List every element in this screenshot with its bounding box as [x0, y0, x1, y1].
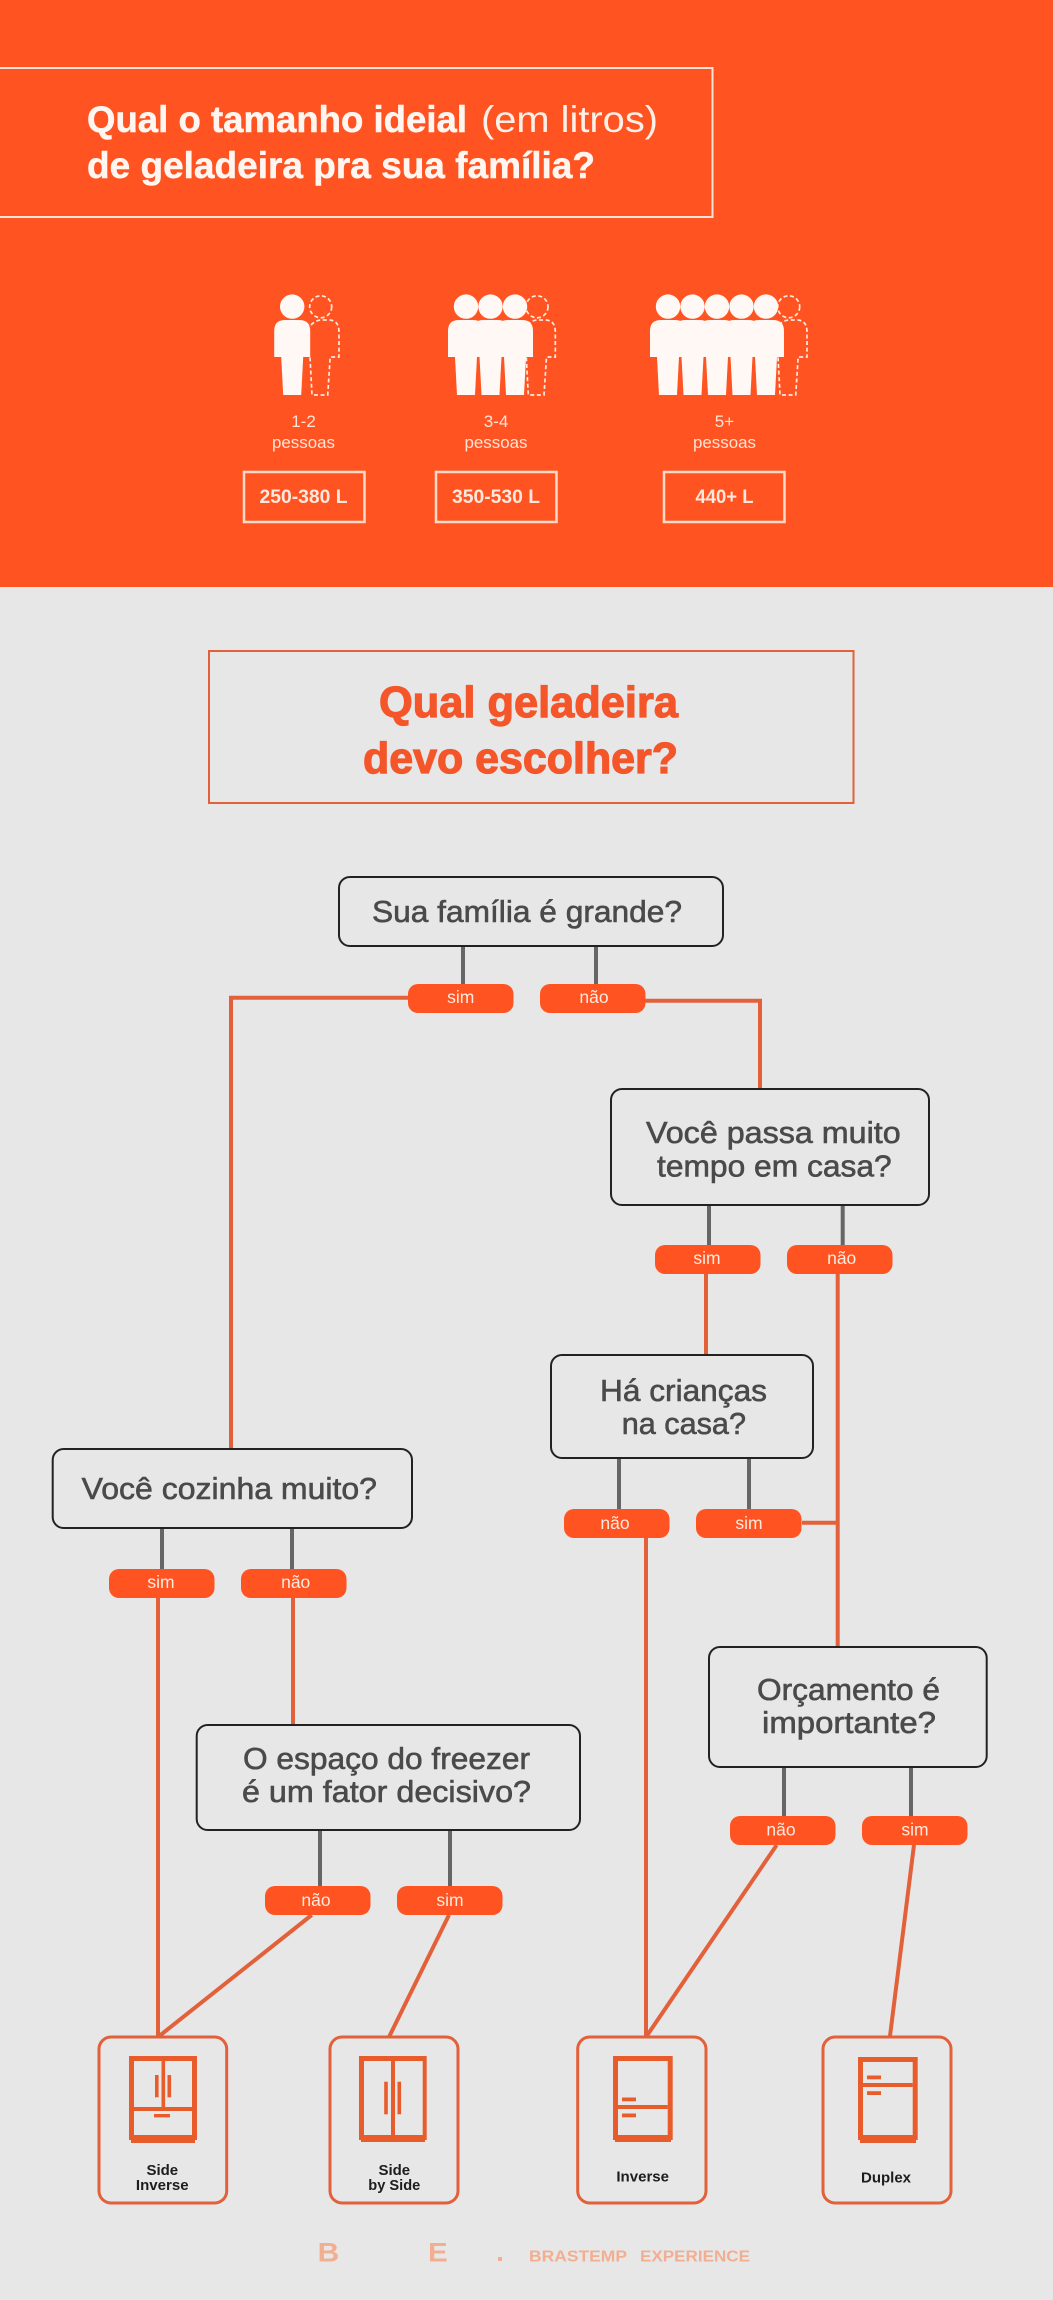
- pill: sim: [696, 1509, 802, 1538]
- footer: Brastemp Experience logo: B: [318, 2238, 339, 2268]
- panel: family size section: [0, 0, 1053, 587]
- footer: Brastemp Experience logo: [318, 2238, 750, 2268]
- question: Orçamento é importante: Orçamento é: [757, 1672, 940, 1707]
- card: Duplex: [823, 2037, 951, 2203]
- flowchart connectors: [158, 946, 914, 2037]
- footer: Brastemp Experience logo: EXPERIENCE: [640, 2249, 750, 2266]
- icon: 1-2 people: [274, 294, 339, 395]
- footer: Brastemp Experience logo: E: [428, 2238, 448, 2268]
- pill: não: [241, 1569, 346, 1598]
- label: Side Inverse: Side: [146, 2162, 178, 2179]
- title: ideal size: (em litros): [481, 99, 658, 140]
- pill: não: [540, 984, 646, 1013]
- heading: Qual geladeira devo escolher: Qual geladeira: [379, 678, 679, 727]
- pill: sim: sim: [436, 1890, 464, 1910]
- pill: sim: [109, 1569, 214, 1598]
- label: 3-4 pessoas: pessoas: [464, 433, 528, 452]
- question: Você cozinha muito: Você cozinha muito?: [82, 1471, 377, 1506]
- label: 5+ pessoas: 5+: [715, 412, 734, 431]
- badge: 250-380 L: [244, 472, 364, 522]
- pill: não: não: [579, 987, 609, 1007]
- pill: sim: sim: [447, 987, 474, 1007]
- question: Sua família é grande: Sua família é grande?: [372, 894, 682, 929]
- icon: 5+ people: [650, 294, 807, 395]
- footer: Brastemp Experience logo: BRASTEMP: [529, 2249, 627, 2266]
- pill: não: não: [827, 1248, 856, 1268]
- pill: não: [730, 1816, 836, 1845]
- card: Inverse: [578, 2037, 706, 2203]
- pill: sim: [397, 1886, 502, 1915]
- pill: não: não: [766, 1820, 796, 1840]
- question: Você passa muito tempo em casa: tempo em casa?: [657, 1149, 892, 1184]
- label: Inverse: Inverse: [616, 2169, 669, 2186]
- pill: sim: sim: [147, 1572, 175, 1592]
- label: 1-2 pessoas: pessoas: [272, 433, 335, 452]
- question: O espaço do freezer: é um fator decisivo?: [242, 1774, 531, 1809]
- label: Duplex: Duplex: [861, 2170, 912, 2187]
- question: Há crianças na casa: Há crianças: [600, 1373, 767, 1408]
- label: 1-2 pessoas: 1-2: [291, 412, 316, 431]
- pill: sim: [862, 1816, 968, 1845]
- title: ideal size: de geladeira pra sua família?: [87, 145, 595, 186]
- question: Há crianças na casa: [551, 1355, 813, 1458]
- icon: 3-4 people: [448, 294, 555, 395]
- question: O espaço do freezer: [197, 1725, 580, 1830]
- question: Você cozinha muito: [53, 1449, 412, 1528]
- title: ideal size: Qual o tamanho ideial: [87, 99, 467, 140]
- label: 3-4 pessoas: [464, 412, 528, 452]
- question: O espaço do freezer: O espaço do freezer: [243, 1741, 530, 1776]
- pill: não: [265, 1886, 370, 1915]
- question: Sua família é grande: [339, 877, 723, 946]
- icon: side by side fridge: [359, 2056, 427, 2142]
- question: Há crianças na casa: na casa?: [622, 1406, 746, 1441]
- card: Side Inverse: [99, 2037, 227, 2203]
- card: Side by Side: [330, 2037, 458, 2203]
- badge: 350-530 L: 350-530 L: [452, 487, 540, 508]
- label: Side Inverse: [136, 2162, 189, 2194]
- question: Você passa muito tempo em casa: [611, 1089, 929, 1205]
- badge: 440+ L: [664, 472, 784, 522]
- icon: duplex fridge: [858, 2057, 918, 2143]
- pill: não: [787, 1245, 892, 1274]
- pill: sim: sim: [693, 1248, 721, 1268]
- question: Orçamento é importante: importante?: [762, 1705, 936, 1740]
- pill: não: não: [301, 1890, 331, 1910]
- title: ideal size: [0, 68, 712, 217]
- question: Orçamento é importante: [709, 1647, 987, 1767]
- pill: não: não: [600, 1513, 630, 1533]
- question: Você passa muito tempo em casa: Você passa muito: [646, 1115, 901, 1150]
- pill: não: não: [281, 1572, 310, 1592]
- label: Side by Side: [368, 2162, 420, 2194]
- label: Side Inverse: Inverse: [136, 2177, 189, 2194]
- icon: inverse fridge: [613, 2056, 673, 2142]
- label: 5+ pessoas: pessoas: [693, 433, 756, 452]
- pill: sim: sim: [735, 1513, 763, 1533]
- pill: sim: [655, 1245, 760, 1274]
- icon: side inverse fridge: [129, 2056, 197, 2143]
- badge: 250-380 L: 250-380 L: [260, 487, 348, 508]
- badge: 440+ L: 440+ L: [696, 487, 754, 508]
- heading: Qual geladeira devo escolher: [209, 651, 854, 803]
- label: Side by Side: by Side: [368, 2177, 420, 2194]
- pill: sim: [408, 984, 514, 1013]
- heading: Qual geladeira devo escolher: devo escolher?: [363, 734, 678, 783]
- label: 5+ pessoas: [693, 412, 756, 452]
- label: 3-4 pessoas: 3-4: [484, 412, 508, 431]
- pill: não: [564, 1509, 670, 1538]
- badge: 350-530 L: [436, 472, 556, 522]
- label: Side by Side: Side: [378, 2162, 410, 2179]
- pill: sim: sim: [901, 1820, 929, 1840]
- label: 1-2 pessoas: [272, 412, 335, 452]
